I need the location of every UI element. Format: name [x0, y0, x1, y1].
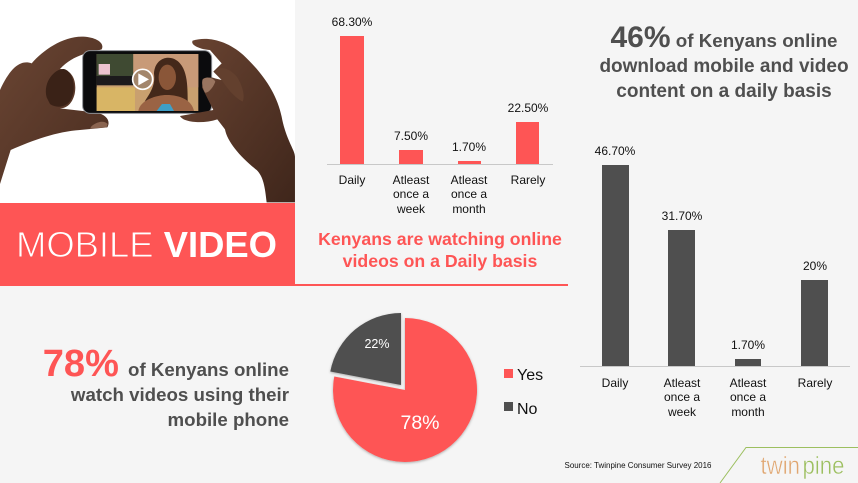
panel: title banner [0, 203, 295, 286]
bar chart: downloading content: month [731, 405, 765, 419]
legend: Yes [517, 367, 543, 384]
text: 78% watch on mobile: mobile phone [168, 409, 289, 430]
bar chart: downloading content: Atleast [664, 376, 701, 390]
bar chart: downloading content: 31.70% [662, 209, 703, 223]
text: 78% watch on mobile: 78% [43, 343, 119, 385]
bar chart: watching online videos: once a [393, 187, 429, 201]
source note: Source: Twinpine Consumer Survey 2016 [564, 461, 712, 470]
bar chart: downloading content: Atleast [730, 376, 767, 390]
divider line [295, 284, 568, 286]
bar chart: downloading content: week [667, 405, 697, 419]
bar chart: watching online videos: 22.50% [508, 101, 549, 115]
bar chart: watching online videos: Atleast [393, 173, 430, 187]
legend: No [517, 401, 538, 418]
bar chart: downloading content: 20% [803, 259, 827, 273]
heading: watching videos daily: videos on a Daily basis [343, 251, 537, 271]
pie chart: mobile viewing: 22% [364, 337, 390, 351]
bar chart: downloading content: once a [730, 390, 766, 404]
pie chart: mobile viewing: 78% [400, 412, 440, 434]
bar chart: watching online videos: Daily [339, 173, 365, 187]
bar chart: watching online videos: 68.30% [332, 15, 373, 29]
bar chart: downloading content: Daily [602, 376, 628, 390]
bar chart: downloading content [580, 144, 850, 419]
heading: 46% download: 46% [610, 21, 671, 54]
logo: twinpine: twin [760, 452, 800, 480]
bar chart: watching online videos: Atleast [451, 173, 488, 187]
bar chart: downloading content: Rarely [798, 376, 832, 390]
heading: mobile video: MOBILE VIDEO [16, 224, 277, 265]
pie chart: mobile viewing [330, 313, 477, 462]
bar chart: watching online videos [327, 15, 553, 216]
heading: 46% download: of Kenyans online [671, 30, 838, 51]
heading: 46% download: download mobile and video [599, 56, 849, 77]
panel: phone photo [0, 0, 295, 203]
legend [504, 367, 543, 418]
text: 78% watch on mobile: watch videos using their [70, 384, 289, 405]
logo: twinpine [720, 448, 858, 483]
bar chart: downloading content: 1.70% [731, 338, 765, 352]
bar chart: watching online videos: week [396, 202, 426, 216]
heading: 46% download: content on a daily basis [616, 81, 832, 102]
icon: right hand [180, 39, 295, 202]
bar chart: downloading content: 46.70% [595, 144, 636, 158]
icon: left hand [0, 37, 109, 184]
icon: phone [83, 51, 212, 113]
bar chart: watching online videos: month [452, 202, 486, 216]
bar chart: watching online videos: Rarely [511, 173, 545, 187]
logo: twinpine: pine [802, 452, 844, 480]
bar chart: watching online videos: once a [451, 187, 487, 201]
bar chart: watching online videos: 7.50% [394, 129, 428, 143]
heading: watching videos daily: Kenyans are watching online [318, 229, 562, 249]
bar chart: watching online videos: 1.70% [452, 140, 486, 154]
bar chart: downloading content: once a [664, 390, 700, 404]
text: 78% watch on mobile: of Kenyans online [123, 359, 289, 380]
